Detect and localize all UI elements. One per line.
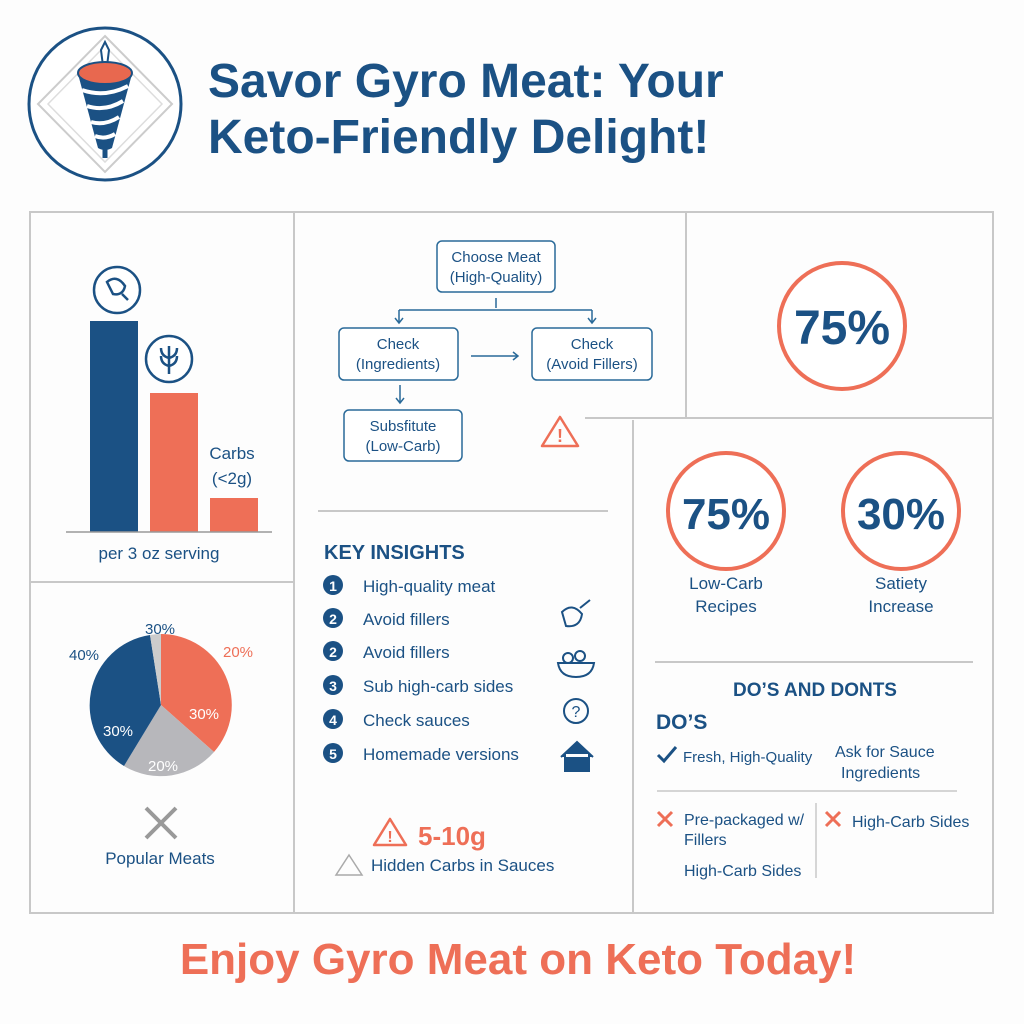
panel: dos and donts: DO’S AND DONTS	[733, 680, 897, 701]
panel: dos and donts: High-Carb Sides	[684, 863, 801, 880]
panel: dos and donts: Fillers	[684, 832, 727, 849]
panel: key insights: 5	[329, 746, 337, 762]
panel: flowchart: (Low-Carb)	[365, 438, 441, 455]
stat: low-carb recipes: Recipes	[695, 597, 757, 616]
stat: satiety increase: 30%	[857, 490, 945, 539]
panel: flowchart: (Ingredients)	[356, 356, 440, 373]
panel: flowchart: (Avoid Fillers)	[546, 356, 638, 373]
panel: dos and donts: High-Carb Sides	[852, 814, 969, 831]
panel: key insights: 4	[329, 712, 337, 728]
panel: key insights: Check sauces	[363, 711, 470, 730]
title	[208, 55, 724, 164]
logo: gyro icon	[29, 28, 181, 180]
panel: dos and donts	[656, 680, 969, 880]
panel: key insights: 2	[329, 611, 337, 627]
panel: key insights: Avoid fillers	[363, 643, 450, 662]
panel: pie chart: 20%	[223, 644, 253, 661]
panel: pie chart: 20%	[148, 758, 178, 775]
panel: key insights: 2	[329, 644, 337, 660]
panel: flowchart	[339, 241, 652, 461]
title: Savor Gyro Meat: Your	[208, 55, 724, 108]
panel: key insights: KEY INSIGHTS	[324, 542, 465, 564]
panel: bar chart	[66, 267, 272, 563]
panel: key insights: Avoid fillers	[363, 610, 450, 629]
panel: flowchart: (High-Quality)	[450, 269, 542, 286]
footer heading: Enjoy Gyro Meat on Keto Today!	[180, 935, 856, 984]
callout: hidden carbs: !	[387, 829, 393, 846]
panel: dos and donts: Ingredients	[841, 765, 920, 782]
panel: flowchart: !	[557, 426, 563, 446]
panel: flowchart: Subsfitute	[370, 418, 436, 435]
panel: key insights: Sub high-carb sides	[363, 677, 513, 696]
title: Keto-Friendly Delight!	[208, 111, 709, 164]
callout: hidden carbs: Hidden Carbs in Sauces	[371, 856, 554, 875]
panel: flowchart: Check	[377, 336, 420, 353]
stat: 75% big: 75%	[794, 302, 890, 355]
stat: low-carb recipes	[668, 453, 784, 616]
panel: dos and donts: Pre-packaged w/	[684, 812, 805, 829]
stat: satiety increase: Satiety	[875, 574, 927, 593]
callout: hidden carbs: 5-10g	[418, 821, 486, 851]
panel: pie chart: 30%	[189, 706, 219, 723]
panel: dos and donts: DO’S	[656, 711, 707, 734]
panel: dos and donts: Fresh, High-Quality	[683, 749, 813, 766]
callout: hidden carbs	[336, 819, 554, 875]
panel: pie chart: 30%	[103, 723, 133, 740]
panel: pie chart: 40%	[69, 647, 99, 664]
panel: pie chart: Popular Meats	[105, 849, 215, 868]
stat: satiety increase: Increase	[868, 597, 934, 616]
panel: pie chart	[69, 621, 253, 868]
panel: key insights	[323, 542, 594, 771]
panel: key insights: 1	[329, 578, 337, 594]
panel: bar chart: Carbs	[209, 444, 255, 463]
panel: key insights: 3	[329, 678, 337, 694]
stat: low-carb recipes: Low-Carb	[689, 574, 763, 593]
panel: key insights: Homemade versions	[363, 745, 519, 764]
panel: flowchart: Choose Meat	[451, 249, 541, 266]
panel: key insights: High-quality meat	[363, 577, 496, 596]
panel: bar chart: (<2g)	[212, 469, 252, 488]
stat: low-carb recipes: 75%	[682, 490, 770, 539]
panel: key insights: ?	[572, 704, 581, 721]
stat: satiety increase	[843, 453, 959, 616]
panel: flowchart: Check	[571, 336, 614, 353]
panel: bar chart: per 3 oz serving	[99, 544, 219, 563]
panel: dos and donts: Ask for Sauce	[835, 744, 935, 761]
panel: pie chart: 30%	[145, 621, 175, 638]
stat: 75% big	[779, 263, 905, 389]
outer frame	[30, 212, 993, 913]
